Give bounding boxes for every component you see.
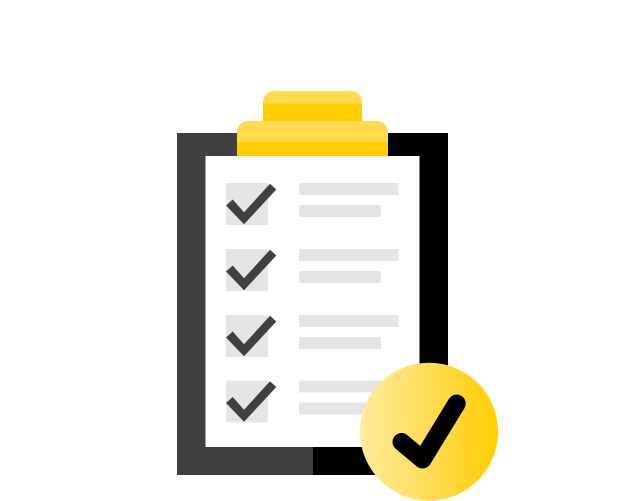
checklist row 2 [226, 249, 398, 291]
clipboard board [177, 133, 448, 475]
checklist row 1 [226, 183, 398, 225]
checklist row 4 [226, 380, 398, 422]
checklist row 3 [226, 315, 398, 357]
paper sheet [206, 156, 420, 447]
clip: lower tab [237, 121, 388, 156]
approval badge [360, 363, 498, 501]
clip: upper tab [263, 91, 362, 122]
